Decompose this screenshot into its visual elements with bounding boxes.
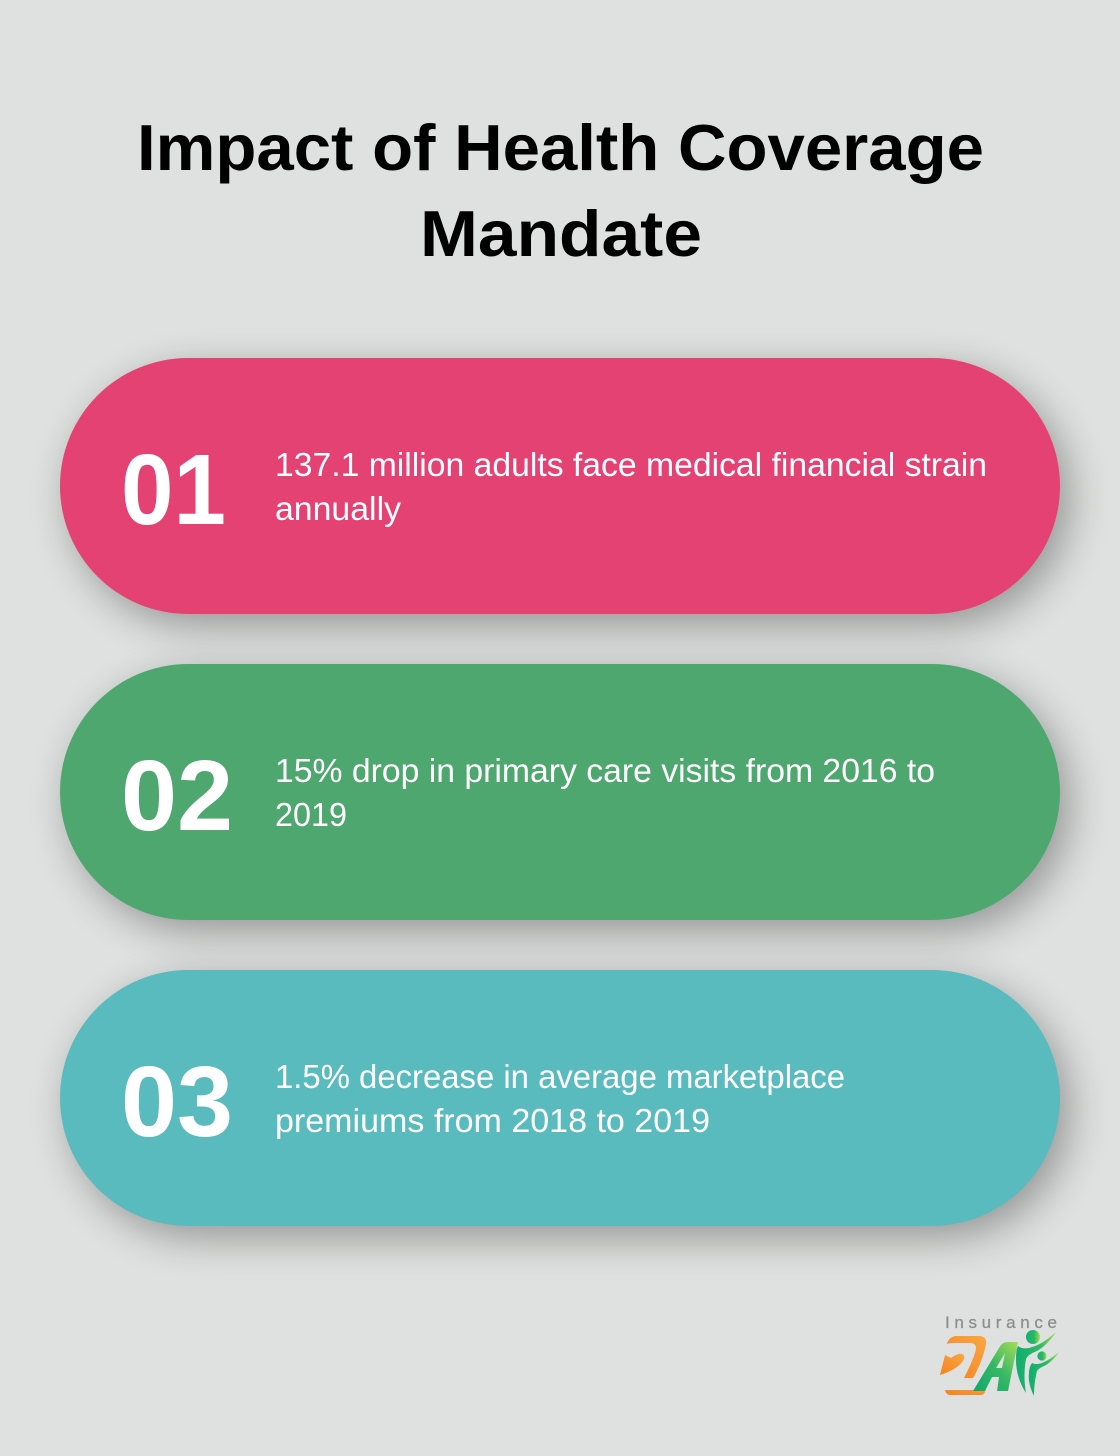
logo: small figure	[1029, 1351, 1059, 1396]
logo: green A	[973, 1342, 1018, 1391]
logo: Insurance2Aii	[940, 1313, 1059, 1396]
text: item 02: 15% drop in primary care visits from 2016 to	[275, 752, 935, 789]
title: Impact of Health Coverage	[137, 111, 984, 184]
text: item 03: 1.5% decrease in average marketplace	[275, 1058, 845, 1095]
text: item 03	[275, 1058, 845, 1139]
text: item 03: premiums from 2018 to 2019	[275, 1102, 710, 1139]
text: item 01: annually	[275, 490, 402, 527]
panel: item 01	[60, 358, 1060, 614]
number 03: 03	[121, 1046, 233, 1158]
text: item 01: 137.1 million adults face medical financial strain	[275, 446, 987, 483]
logo: orange heart	[940, 1354, 964, 1375]
panel: item 02	[60, 664, 1060, 920]
title	[137, 111, 984, 270]
panel: item 03	[60, 970, 1060, 1226]
text: item 02	[275, 752, 935, 833]
number 01: 01	[121, 434, 226, 546]
title: Mandate	[420, 197, 702, 270]
logo: orange 2 base	[945, 1380, 988, 1395]
text: item 01	[275, 446, 987, 527]
logo wordmark: Insurance	[945, 1313, 1057, 1332]
text: item 02: 2019	[275, 796, 347, 833]
logo: orange 2	[947, 1336, 986, 1378]
logo: large figure	[1016, 1330, 1056, 1393]
number 02: 02	[121, 740, 233, 852]
